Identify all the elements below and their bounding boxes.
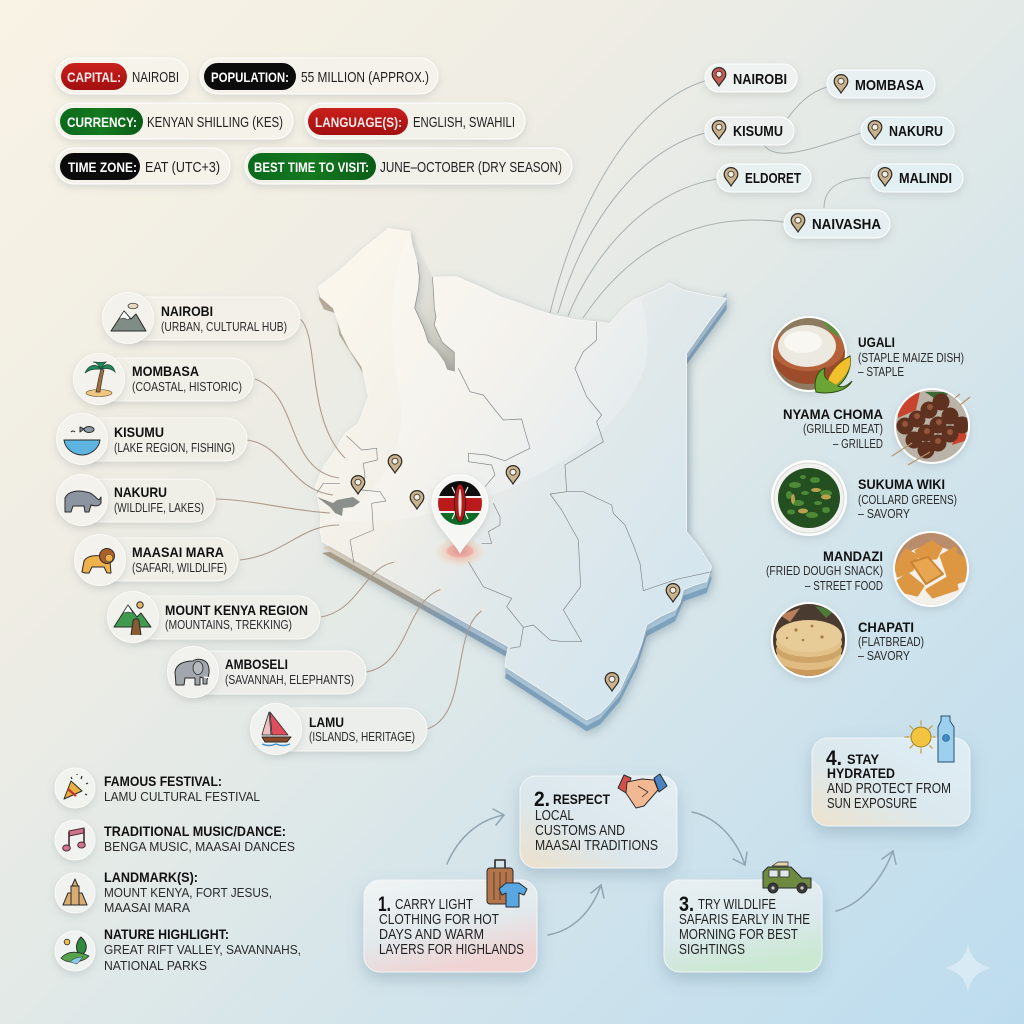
map lake Turkana notch xyxy=(410,232,455,372)
icon: fort tower xyxy=(63,879,87,905)
city label: Nairobi xyxy=(705,64,797,92)
attraction: Nairobi: NAIROBI xyxy=(161,303,213,319)
attraction: Mount Kenya Region: MOUNT KENYA REGION xyxy=(165,602,308,618)
tip card 1: LAYERS FOR HIGHLANDS xyxy=(379,941,524,958)
food: Chapati xyxy=(770,602,924,682)
food: Nyama Choma: NYAMA CHOMA xyxy=(783,406,883,422)
decorative sparkle xyxy=(944,944,992,992)
tip card 4: STAY xyxy=(847,751,880,767)
attraction: Nairobi xyxy=(102,292,300,344)
arrow: from tip 1 to tip 2 lower xyxy=(548,885,604,935)
city label: Eldoret xyxy=(717,164,811,192)
food: Chapati: (FLATBREAD) xyxy=(858,634,924,649)
food: Chapati: – SAVORY xyxy=(858,648,910,663)
tip card 4: HYDRATED xyxy=(827,765,895,781)
food: Sukuma Wiki xyxy=(771,460,957,536)
icon: party popper xyxy=(64,774,88,799)
city label: Mombasa xyxy=(827,70,935,98)
icon: lake with fish xyxy=(64,426,100,455)
highlight: famous festival: FAMOUS FESTIVAL: xyxy=(104,773,222,789)
city label: Nairobi: NAIROBI xyxy=(733,71,787,88)
tip card 3: SIGHTINGS xyxy=(679,941,745,958)
tip card 3: 3. xyxy=(679,893,694,916)
highlight: landmarks xyxy=(55,869,272,915)
food: Ugali xyxy=(770,316,964,396)
highlight: nature: NATURE HIGHLIGHT: xyxy=(104,926,229,942)
attraction: Maasai Mara xyxy=(74,534,238,586)
city label: Naivasha xyxy=(784,210,890,238)
highlight: landmarks: LANDMARK(S): xyxy=(104,869,198,885)
tip card 1: CARRY LIGHT xyxy=(395,896,473,913)
attraction: Kisumu xyxy=(56,414,247,464)
attraction: Nakuru xyxy=(56,474,215,526)
fact: best time to visit: BEST TIME TO VISIT: xyxy=(254,159,369,175)
attraction: Mombasa: (COASTAL, HISTORIC) xyxy=(132,379,242,394)
fact: time zone: EAT (UTC+3) xyxy=(145,160,220,176)
highlight: traditional music and dance: BENGA MUSIC, MAASAI DANCES xyxy=(104,839,295,854)
photo: stacked flatbread xyxy=(770,602,850,682)
panel: food list xyxy=(766,316,971,682)
tip card 3: MORNING FOR BEST xyxy=(679,926,798,943)
attraction: Amboseli xyxy=(168,646,366,698)
tip card 2: MAASAI TRADITIONS xyxy=(535,837,658,854)
city label: Kisumu xyxy=(705,117,794,145)
attraction: Mombasa: MOMBASA xyxy=(132,363,199,379)
attraction: Amboseli: AMBOSELI xyxy=(225,656,288,672)
fact: capital xyxy=(56,58,188,94)
attraction: Maasai Mara: MAASAI MARA xyxy=(132,544,224,560)
icon: mountains and cloud xyxy=(111,303,146,331)
arrow: tip 3 to tip 4 xyxy=(836,851,896,911)
tip card 2: 2. xyxy=(534,788,550,811)
tip card 4: SUN EXPOSURE xyxy=(827,795,917,812)
fact: currency: KENYAN SHILLING (KES) xyxy=(147,115,283,131)
map north-west cliff xyxy=(318,287,370,397)
food: Nyama Choma: – GRILLED xyxy=(833,436,883,451)
attraction: Lamu xyxy=(250,704,427,754)
map pins xyxy=(351,455,680,691)
tip card 3: TRY WILDLIFE xyxy=(698,896,776,913)
highlight: nature xyxy=(55,926,301,973)
connector lines: attractions to map xyxy=(216,319,485,729)
icon: lion xyxy=(82,548,114,573)
icon: handshake xyxy=(618,774,667,808)
food: Ugali: UGALI xyxy=(858,334,895,350)
tip card 4: 4. xyxy=(826,747,842,770)
panel: attractions list xyxy=(56,292,427,754)
highlight: nature: NATIONAL PARKS xyxy=(104,958,207,973)
attraction: Kisumu: (LAKE REGION, FISHING) xyxy=(114,440,235,455)
attraction: Mount Kenya Region: (MOUNTAINS, TREKKING) xyxy=(165,617,292,632)
fact: languages: ENGLISH, SWAHILI xyxy=(413,115,515,131)
food: Ugali: – STAPLE xyxy=(858,364,904,379)
icon: elephant xyxy=(175,659,212,685)
highlight: landmarks: MAASAI MARA xyxy=(104,900,190,915)
city label: Malindi xyxy=(871,164,963,192)
fact: time zone: TIME ZONE: xyxy=(68,159,137,175)
fact: best time to visit xyxy=(245,148,572,184)
flag pin marker xyxy=(432,475,488,567)
photo: ugali bowl with maize xyxy=(770,316,852,396)
food: Chapati: CHAPATI xyxy=(858,619,914,635)
tip card 2: CUSTOMS AND xyxy=(535,822,625,839)
fact: population xyxy=(200,58,438,94)
attraction: Lamu: LAMU xyxy=(309,714,344,730)
icon: Mount Kenya and trekker xyxy=(114,602,151,635)
city label: Eldoret: ELDORET xyxy=(745,170,801,187)
tip card 3: SAFARIS EARLY IN THE xyxy=(679,911,810,928)
map gloss highlight xyxy=(320,230,648,522)
icon: leaf and landscape xyxy=(61,937,89,964)
icon: rhino xyxy=(65,491,101,512)
map extruded side xyxy=(322,292,727,731)
attraction: Amboseli: (SAVANNAH, ELEPHANTS) xyxy=(225,672,354,687)
attraction: Maasai Mara: (SAFARI, WILDLIFE) xyxy=(132,560,227,575)
attraction: Nairobi: (URBAN, CULTURAL HUB) xyxy=(161,319,287,334)
panel: travel tips xyxy=(364,716,970,972)
food: Mandazi: – STREET FOOD xyxy=(805,578,883,593)
attraction: Kisumu: KISUMU xyxy=(114,424,164,440)
fact: best time to visit: JUNE–OCTOBER (DRY SEASON) xyxy=(380,160,562,176)
tip card 2 xyxy=(520,774,677,868)
panel: culture highlights xyxy=(55,768,301,973)
fact: languages xyxy=(305,103,525,139)
photo: collard greens xyxy=(771,460,847,536)
highlight: famous festival xyxy=(55,768,260,808)
food: Mandazi: MANDAZI xyxy=(823,548,883,564)
highlight: nature: GREAT RIFT VALLEY, SAVANNAHS, xyxy=(104,942,301,957)
arrow: tip 2 to tip 3 xyxy=(692,812,747,865)
attraction: Nakuru: NAKURU xyxy=(114,484,167,500)
food: Mandazi xyxy=(766,531,971,609)
attraction: Mount Kenya Region xyxy=(108,592,320,642)
fact: currency xyxy=(56,103,293,139)
icon: dhow sailboat xyxy=(262,712,291,746)
food: Nyama Choma xyxy=(783,388,970,465)
fact: population: 55 MILLION (APPROX.) xyxy=(301,70,429,86)
tip card 1: DAYS AND WARM xyxy=(379,926,484,943)
attraction: Mombasa xyxy=(74,354,253,404)
tip card 4 xyxy=(812,716,970,826)
attraction: Lamu: (ISLANDS, HERITAGE) xyxy=(309,729,415,744)
food: Sukuma Wiki: – SAVORY xyxy=(858,506,910,521)
fact: currency: CURRENCY: xyxy=(67,114,137,130)
highlight: traditional music and dance xyxy=(55,820,295,860)
fact: population: POPULATION: xyxy=(211,69,289,85)
food: Sukuma Wiki: (COLLARD GREENS) xyxy=(858,492,957,507)
fact: time zone xyxy=(56,148,230,184)
map of Kenya xyxy=(315,228,727,731)
city label: Kisumu: KISUMU xyxy=(733,123,783,140)
highlight: landmarks: MOUNT KENYA, FORT JESUS, xyxy=(104,885,272,900)
tip card 1 xyxy=(364,860,537,972)
map region borders xyxy=(317,322,712,648)
city label: Nakuru xyxy=(861,117,954,145)
panel: key facts pills xyxy=(56,58,572,184)
photo: fried dough snacks xyxy=(893,531,971,609)
city label: Nakuru: NAKURU xyxy=(889,123,943,140)
tip card 1: CLOTHING FOR HOT xyxy=(379,911,499,928)
food: Ugali: (STAPLE MAIZE DISH) xyxy=(858,350,964,365)
icon: palm tree xyxy=(85,362,115,396)
connector lines: city index to map xyxy=(550,81,871,318)
icon: sun and water bottle xyxy=(905,716,954,762)
fact: languages: LANGUAGE(S): xyxy=(315,114,402,130)
panel: city index labels xyxy=(705,64,963,238)
map top surface xyxy=(315,228,727,720)
city label: Malindi: MALINDI xyxy=(899,170,952,187)
tip card 3 xyxy=(664,862,822,972)
food: Sukuma Wiki: SUKUMA WIKI xyxy=(858,476,945,492)
attraction: Nakuru: (WILDLIFE, LAKES) xyxy=(114,500,204,515)
highlight: famous festival: LAMU CULTURAL FESTIVAL xyxy=(104,789,260,804)
food: Mandazi: (FRIED DOUGH SNACK) xyxy=(766,563,883,578)
tip card 2: LOCAL xyxy=(535,807,574,824)
city label: Mombasa: MOMBASA xyxy=(855,77,924,94)
tip card 4: AND PROTECT FROM xyxy=(827,780,951,797)
city label: Naivasha: NAIVASHA xyxy=(812,216,881,233)
fact: capital: NAIROBI xyxy=(132,70,179,86)
food: Nyama Choma: (GRILLED MEAT) xyxy=(803,421,883,436)
arrow: tip 1 to tip 2 xyxy=(447,809,504,864)
tip card 1: 1. xyxy=(378,893,391,916)
icon: safari jeep xyxy=(763,862,811,893)
photo: grilled meat skewers xyxy=(892,388,970,465)
tip card 2: RESPECT xyxy=(553,791,610,807)
map lake Victoria xyxy=(317,497,360,516)
fact: capital: CAPITAL: xyxy=(67,69,121,85)
highlight: traditional music and dance: TRADITIONAL MUSIC/DANCE: xyxy=(104,823,286,839)
icon: suitcase and shirt xyxy=(487,860,527,907)
icon: music note xyxy=(63,828,85,851)
